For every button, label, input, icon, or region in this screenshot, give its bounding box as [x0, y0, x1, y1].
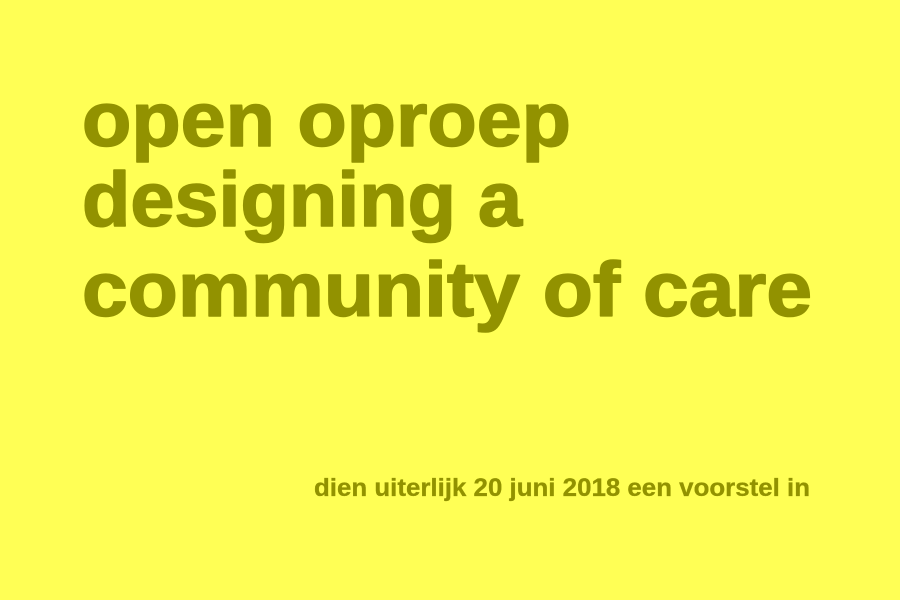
title line 1: open oproep — [82, 77, 571, 163]
title — [82, 77, 812, 333]
deadline text: dien uiterlijk 20 juni 2018 een voorstel in — [314, 474, 810, 502]
title line 3: community of care — [82, 247, 812, 333]
title line 2: designing a — [82, 157, 523, 243]
